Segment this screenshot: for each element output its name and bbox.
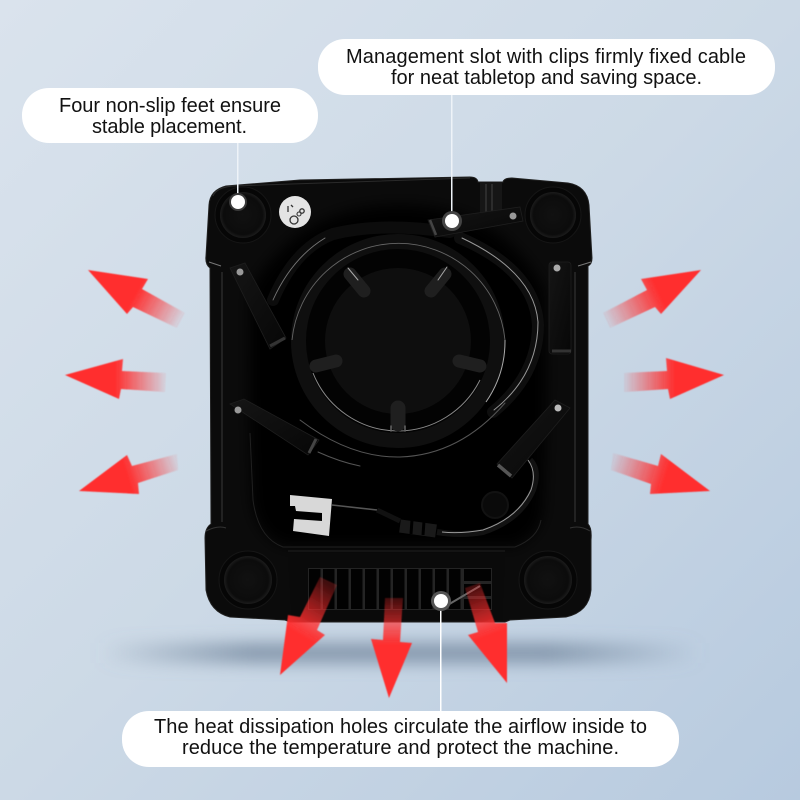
centre disc xyxy=(325,268,471,414)
heat arrow: lower right xyxy=(611,453,710,494)
cable clip: lower right xyxy=(497,400,570,478)
marker: foot xyxy=(229,193,247,211)
heat arrow: upper right xyxy=(603,270,701,328)
coiled power cable xyxy=(273,227,538,466)
marker: vent xyxy=(431,591,451,611)
motor ring xyxy=(291,234,505,448)
disc lugs xyxy=(316,267,480,431)
heat arrow: bottom left xyxy=(280,577,337,675)
heat arrow: bottom right xyxy=(465,583,507,683)
leader line: feet xyxy=(237,143,238,203)
callout: non-slip feet: Four non-slip feet ensure xyxy=(59,95,281,117)
callout: heat dissipation xyxy=(122,711,679,767)
round sticker xyxy=(279,196,311,228)
callout: non-slip feet xyxy=(22,88,318,143)
callout: cable management: for neat tabletop and saving space. xyxy=(391,67,702,89)
cable clip: lower left xyxy=(230,399,319,455)
heat vent grille xyxy=(288,556,505,620)
housing inner recess xyxy=(249,205,546,546)
callout: heat dissipation: The heat dissipation holes circulate the airflow inside to xyxy=(154,716,647,738)
callout: heat dissipation: reduce the temperature and protect the machine. xyxy=(182,737,619,759)
leader line: cable slot xyxy=(451,95,452,221)
floor shadow xyxy=(100,643,700,663)
cable clip: top xyxy=(428,207,523,237)
rubber foot: bottom right xyxy=(519,551,577,609)
heat arrow: bottom centre xyxy=(371,598,412,698)
heat arrow: lower left xyxy=(79,454,178,494)
rubber foot: bottom left xyxy=(219,551,277,609)
rubber foot: top right xyxy=(525,187,581,243)
callout: cable management xyxy=(318,39,775,95)
cable clip: upper right xyxy=(549,262,571,354)
leader line: vent xyxy=(440,601,442,712)
cable clip: upper left xyxy=(230,263,286,349)
rubber foot: top left xyxy=(215,187,271,243)
power plug xyxy=(290,460,536,536)
marker: cable slot xyxy=(442,211,462,231)
cable slot xyxy=(480,183,502,221)
callout: non-slip feet: stable placement. xyxy=(92,116,247,138)
rim highlights xyxy=(206,178,591,551)
heat arrow: upper left xyxy=(88,270,185,328)
callout: cable management: Management slot with clips firmly fixed cable xyxy=(346,46,746,68)
heat arrow: middle right xyxy=(624,358,724,399)
heat arrow: middle left xyxy=(65,359,166,399)
product: appliance base xyxy=(205,177,592,622)
housing outline xyxy=(205,177,592,622)
